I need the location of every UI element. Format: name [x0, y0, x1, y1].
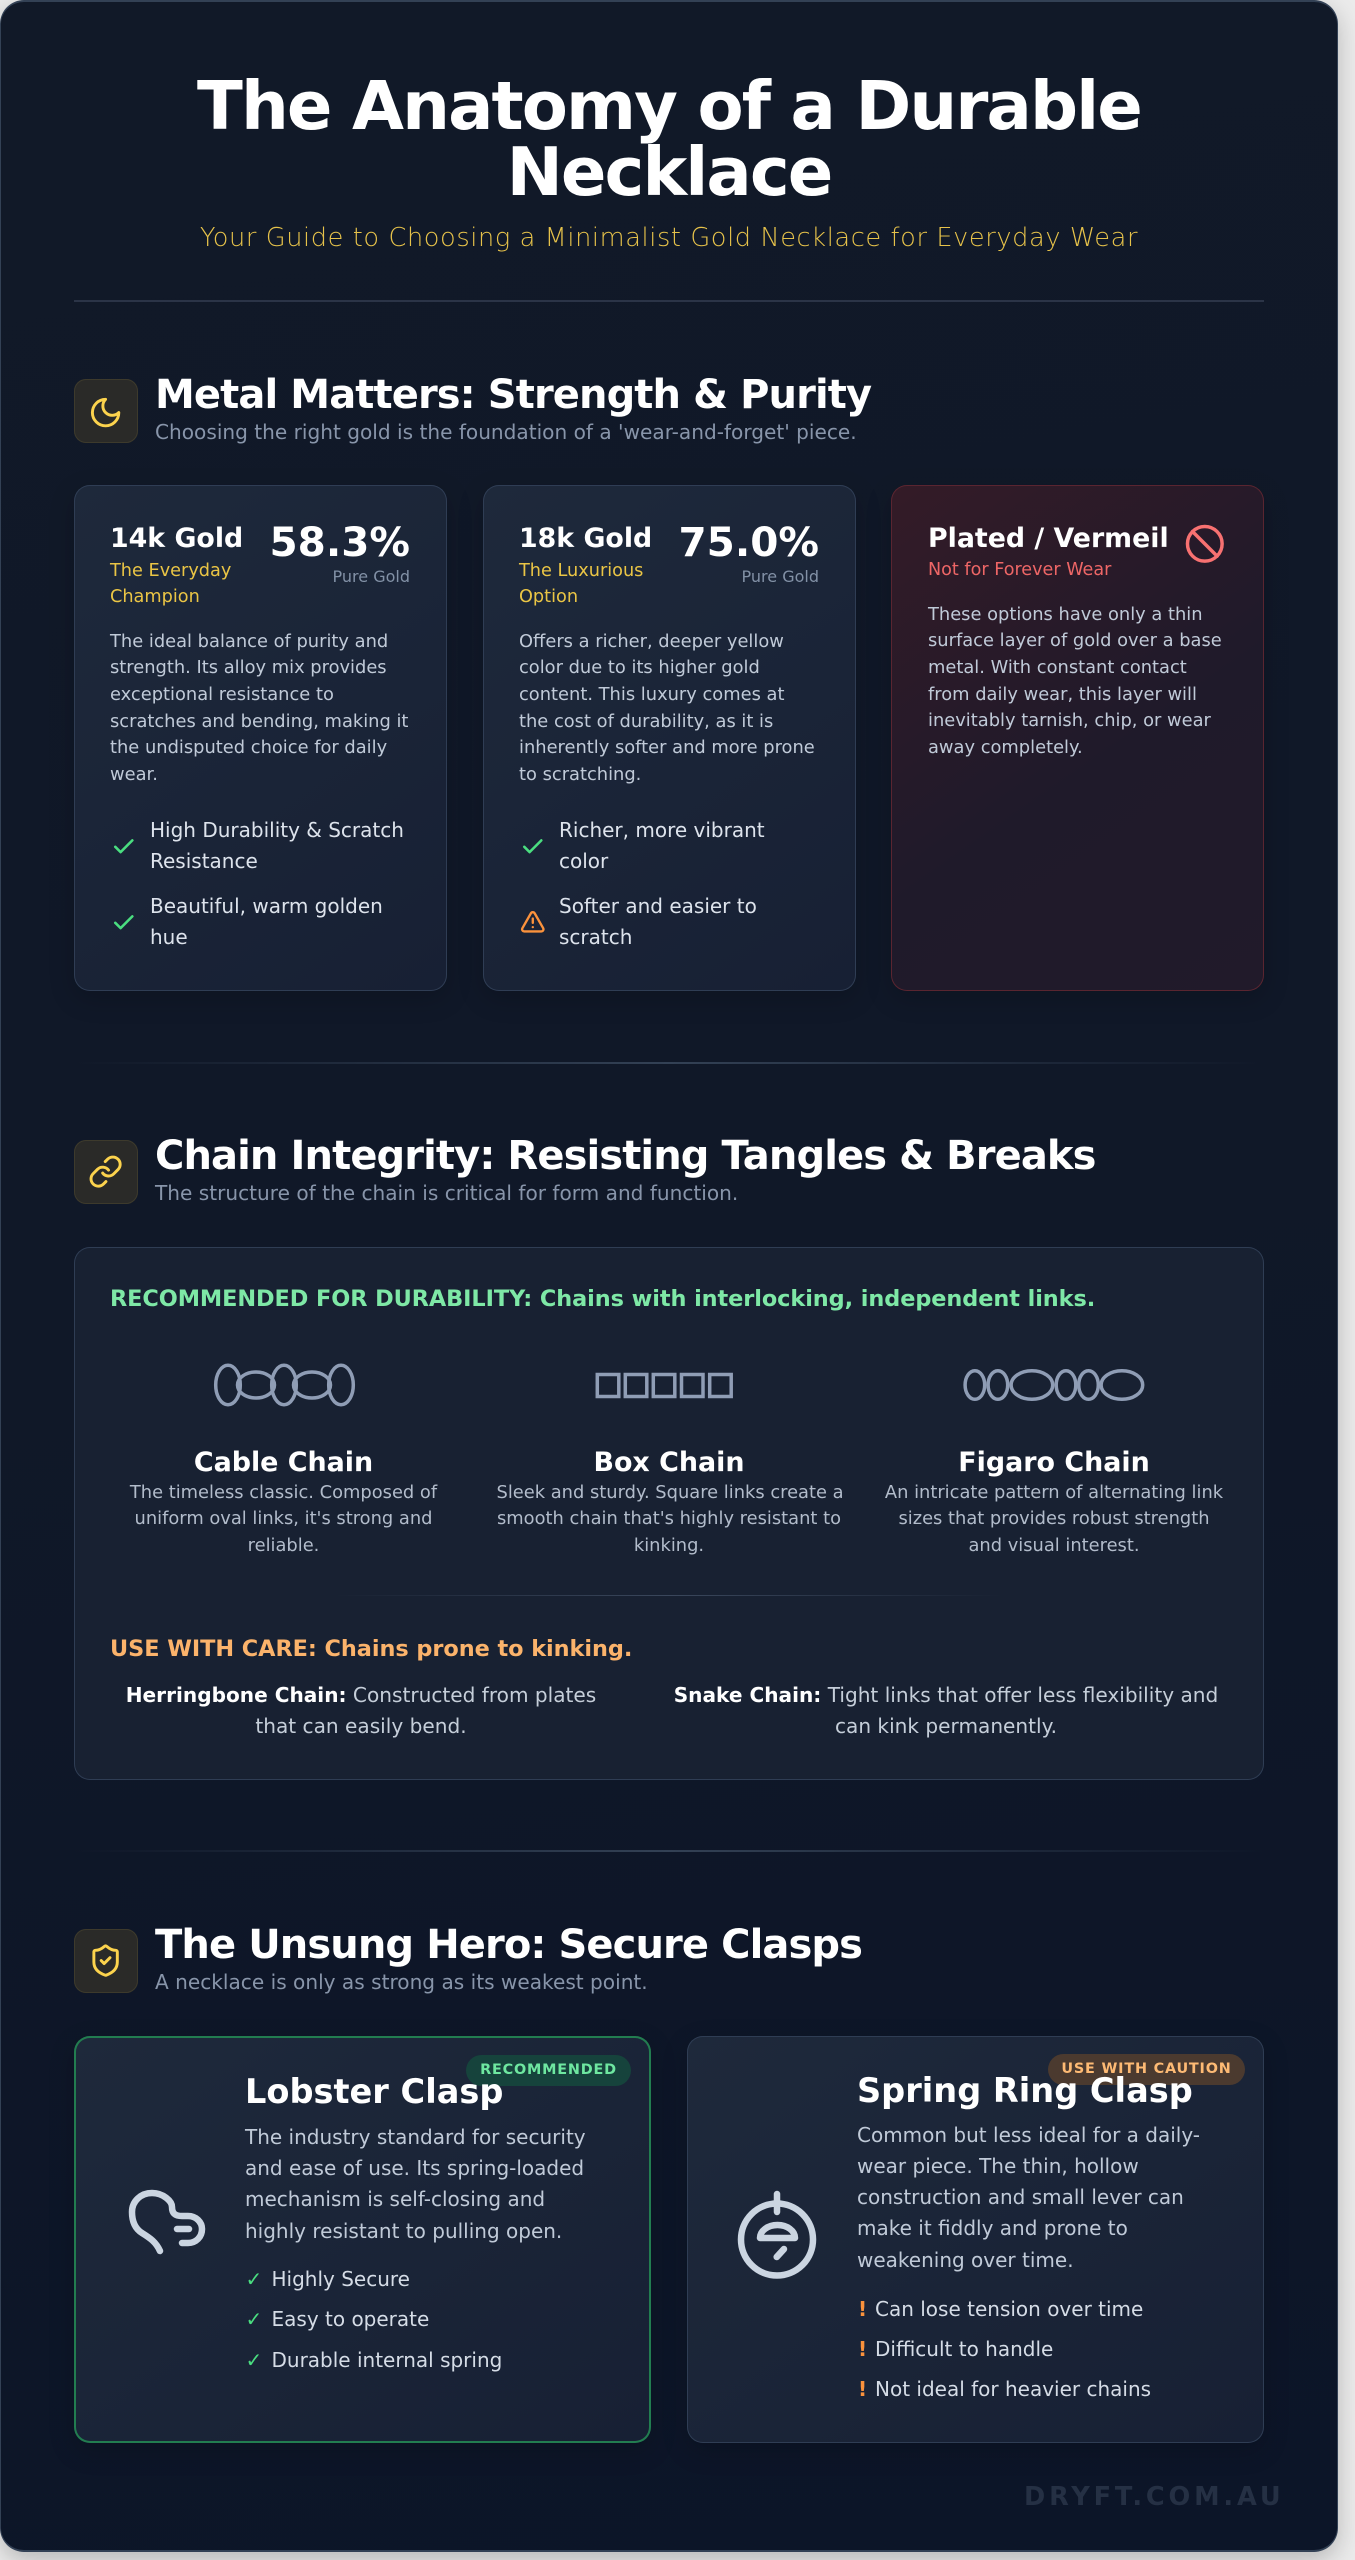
benefit: ✓ — [246, 2307, 262, 2331]
card tagline: The Everyday — [110, 561, 231, 581]
card description: content. This luxury comes at — [519, 684, 784, 705]
chain description: and visual interest. — [968, 1535, 1140, 1556]
list item — [559, 894, 757, 949]
card tagline: The Luxurious — [519, 561, 643, 581]
clasp description: The industry standard for security — [245, 2125, 586, 2149]
clasp description — [244, 2125, 586, 2243]
clasp description: construction and small lever can — [857, 2185, 1184, 2209]
benefit: Highly Secure — [272, 2267, 410, 2291]
chain description: sizes that provides robust strength — [898, 1508, 1210, 1529]
note: snake chain: can kink permanently. — [835, 1714, 1057, 1738]
icon: lobster clasp — [128, 2190, 206, 2254]
card description — [110, 631, 408, 785]
note: snake chain: Snake Chain: Tight links that offer less flexibility and — [674, 1683, 1218, 1707]
panel: spring ring clasp — [687, 2036, 1264, 2443]
card description: inevitably tarnish, chip, or wear — [928, 710, 1211, 731]
icon: warning triangle — [520, 911, 545, 933]
chain description — [885, 1482, 1223, 1556]
chain description — [130, 1482, 438, 1556]
heading: Chain Integrity: Resisting Tangles & Breaks — [155, 1132, 1096, 1178]
icon: check — [114, 839, 134, 854]
card description: inherently softer and more prone — [519, 737, 815, 758]
list item — [150, 894, 383, 949]
icon: check — [114, 915, 134, 930]
clasp description: Common but less ideal for a daily- — [857, 2122, 1200, 2146]
clasp description: highly resistant to pulling open. — [245, 2219, 562, 2243]
chain column: box — [496, 1372, 844, 1556]
card description: surface layer of gold over a base — [928, 630, 1222, 651]
watermark: DRYFT.COM.AU — [1024, 2482, 1284, 2512]
benefit: Easy to operate — [272, 2307, 429, 2331]
list item: Resistance — [150, 849, 258, 873]
purity label: Pure Gold — [333, 567, 410, 586]
chain name: Box Chain — [593, 1447, 745, 1478]
subtitle: Your Guide to Choosing a Minimalist Gold Necklace for Everyday Wear — [200, 223, 1138, 253]
recommended heading: RECOMMENDED FOR DURABILITY: Chains with interlocking, independent links. — [110, 1286, 1095, 1312]
card description: The ideal balance of purity and — [110, 631, 388, 652]
use with care heading: USE WITH CARE: Chains prone to kinking. — [110, 1636, 632, 1662]
panel: plated vermeil — [891, 485, 1264, 991]
card tagline: Option — [519, 587, 578, 607]
card tagline: Champion — [110, 587, 200, 607]
clasp description — [857, 2122, 1200, 2272]
badge: use with caution: USE WITH CAUTION — [1061, 2061, 1232, 2077]
purity figure: 58.3% — [269, 518, 410, 566]
chain description: kinking. — [634, 1535, 704, 1556]
card description: to scratching. — [519, 764, 641, 785]
card title: 18k Gold — [519, 523, 652, 554]
list item: High Durability & Scratch — [150, 818, 404, 842]
list item — [150, 818, 404, 873]
badge: use with caution — [1048, 2054, 1245, 2085]
icon: moon — [74, 379, 138, 443]
benefit: ✓ — [246, 2348, 262, 2372]
clasp name: Spring Ring Clasp — [857, 2071, 1193, 2110]
chain name: Cable Chain — [194, 1447, 373, 1478]
drawback: ! — [858, 2337, 867, 2361]
drawback: Difficult to handle — [875, 2337, 1053, 2361]
section heading: metal matters — [74, 372, 872, 444]
badge: recommended: RECOMMENDED — [480, 2062, 617, 2078]
list item: color — [559, 849, 608, 873]
card description — [519, 631, 815, 785]
purity label: Pure Gold — [742, 567, 819, 586]
list item: hue — [150, 925, 188, 949]
card tagline — [110, 561, 231, 607]
chain column: figaro — [885, 1369, 1223, 1556]
card description: These options have only a thin — [928, 604, 1203, 625]
title — [197, 67, 1141, 211]
icon: box chain — [596, 1372, 733, 1398]
icon: check — [522, 839, 543, 854]
clasp description: wear piece. The thin, hollow — [857, 2154, 1139, 2178]
card description: away completely. — [928, 737, 1083, 758]
card description: from daily wear, this layer will — [928, 684, 1197, 705]
icon: link — [74, 1140, 138, 1204]
panel: 18k gold — [483, 485, 856, 991]
card description: scratches and bending, making it — [110, 711, 408, 732]
card description: wear. — [110, 764, 158, 785]
list item: Beautiful, warm golden — [150, 894, 383, 918]
list item: Softer and easier to — [559, 894, 757, 918]
panel: chain types — [74, 1247, 1264, 1780]
clasp description: make it fiddly and prone to — [857, 2216, 1128, 2240]
icon: cable chain — [214, 1364, 356, 1406]
chain description: reliable. — [248, 1535, 319, 1556]
chain name: Figaro Chain — [958, 1447, 1150, 1478]
card description: Offers a richer, deeper yellow — [519, 631, 784, 652]
purity figure: 75.0% — [678, 518, 819, 566]
benefit: ✓ — [246, 2267, 262, 2291]
panel: lobster clasp — [74, 2036, 651, 2443]
title: Necklace — [507, 133, 831, 211]
drawback: Can lose tension over time — [875, 2296, 1143, 2320]
card title: Plated / Vermeil — [928, 523, 1169, 554]
card description: the undisputed choice for daily — [110, 737, 387, 758]
card description: strength. Its alloy mix provides — [110, 657, 387, 678]
chain description: An intricate pattern of alternating link — [885, 1482, 1223, 1503]
drawback: Not ideal for heavier chains — [875, 2377, 1151, 2401]
note: herringbone chain: Herringbone Chain: Constructed from plates — [126, 1683, 596, 1707]
section heading: chain integrity — [74, 1132, 1096, 1205]
card tagline: Not for Forever Wear — [928, 560, 1111, 580]
panel: 14k gold — [74, 485, 447, 991]
card description: exceptional resistance to — [110, 684, 334, 705]
card description: metal. With constant contact — [928, 657, 1187, 678]
heading: Metal Matters: Strength & Purity — [155, 372, 871, 418]
chain column: cable — [130, 1364, 438, 1556]
clasp description: weakening over time. — [857, 2248, 1074, 2272]
list item: scratch — [559, 925, 632, 949]
clasp name: Lobster Clasp — [245, 2072, 503, 2111]
list item: Richer, more vibrant — [559, 818, 765, 842]
drawback: ! — [858, 2296, 867, 2320]
subheading: Choosing the right gold is the foundation of a 'wear-and-forget' piece. — [155, 420, 857, 444]
icon: ban — [1186, 524, 1224, 563]
note: herringbone chain — [126, 1683, 596, 1738]
card description: the cost of durability, as it is — [519, 711, 773, 732]
chain description: uniform oval links, it's strong and — [135, 1508, 432, 1529]
clasp description: and ease of use. Its spring-loaded — [245, 2156, 584, 2180]
card description — [928, 604, 1222, 758]
icon: shield check — [74, 1929, 138, 1993]
chain description: smooth chain that's highly resistant to — [497, 1508, 841, 1529]
card title: 14k Gold — [110, 523, 243, 554]
benefit: Durable internal spring — [272, 2348, 502, 2372]
clasp description: mechanism is self-closing and — [245, 2187, 545, 2211]
icon: figaro chain — [963, 1369, 1144, 1401]
title: The Anatomy of a Durable — [197, 67, 1141, 145]
badge: recommended — [466, 2055, 631, 2086]
list item — [559, 818, 765, 873]
card tagline — [518, 561, 643, 607]
chain description: Sleek and sturdy. Square links create a — [496, 1482, 844, 1503]
section heading: secure clasps — [74, 1922, 862, 1994]
chain description: The timeless classic. Composed of — [130, 1482, 437, 1503]
note: snake chain — [674, 1683, 1218, 1738]
heading: The Unsung Hero: Secure Clasps — [155, 1922, 862, 1968]
card description: color due to its higher gold — [519, 657, 760, 678]
subheading: A necklace is only as strong as its weakest point. — [155, 1970, 648, 1994]
chain description — [496, 1482, 844, 1556]
note: herringbone chain: that can easily bend. — [255, 1714, 467, 1738]
icon: spring ring clasp — [738, 2190, 816, 2279]
subheading: The structure of the chain is critical for form and function. — [155, 1181, 738, 1205]
drawback: ! — [858, 2377, 867, 2401]
